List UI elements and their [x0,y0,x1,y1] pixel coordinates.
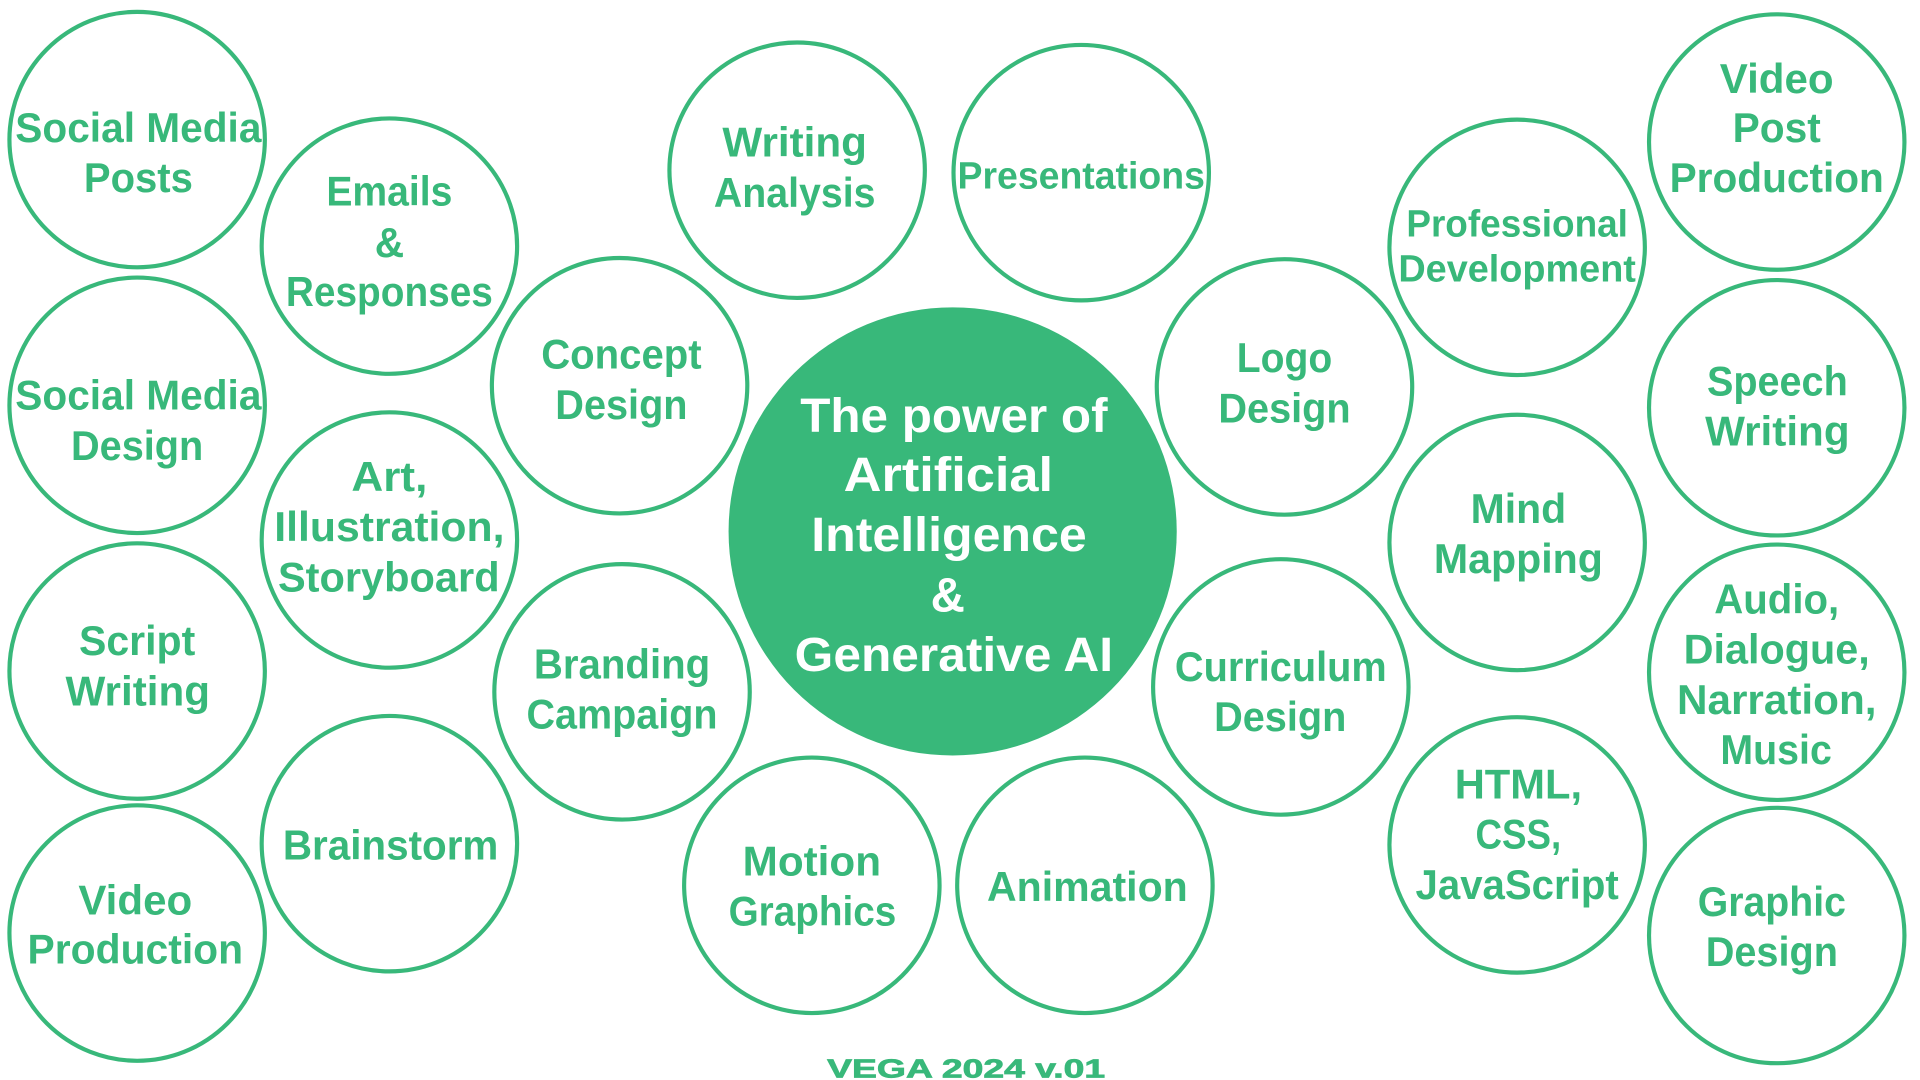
node: Social Media Posts: Posts [84,154,193,201]
node: Script Writing: Script [79,617,195,664]
node: Mind Mapping: Mind [1471,485,1566,532]
central hub: The power of AI and Generative AI: & [931,570,965,623]
node: Audio, Dialogue, Narration, Music: Music [1720,726,1832,773]
node: Logo Design: Logo [1237,334,1332,381]
node: Art, Illustration, Storyboard: Art, [351,453,427,500]
node: Art, Illustration, Storyboard: Storyboard [278,553,500,600]
node: HTML, CSS, JavaScript: JavaScript [1416,861,1619,908]
node: Speech Writing: Speech [1707,358,1848,405]
node: Audio, Dialogue, Narration, Music: Narration, [1677,676,1877,723]
node: HTML, CSS, JavaScript [1389,717,1645,973]
node: Video Post Production [1649,14,1904,270]
node: Social Media Posts: Social Media [15,104,262,151]
node: Emails & Responses: & [375,219,404,266]
node: Logo Design: Design [1218,384,1351,431]
node: Social Media Posts [9,12,265,267]
node: Animation: Animation [987,863,1188,910]
node: Graphic Design: Design [1706,928,1838,975]
central hub: The power of AI and Generative AI: Artificial [844,449,1053,502]
node: Brainstorm: Brainstorm [283,822,498,869]
node: Video Post Production: Video [1720,55,1834,102]
node: Mind Mapping: Mapping [1434,535,1603,582]
node: Video Post Production: Production [1670,154,1884,201]
node: Emails & Responses: Responses [286,268,493,315]
node: Audio, Dialogue, Narration, Music: Audio, [1714,575,1839,622]
node: Audio, Dialogue, Narration, Music [1649,545,1904,800]
node: Motion Graphics: Graphics [729,888,896,935]
node: Video Production [9,805,265,1061]
node: Social Media Design: Design [71,422,203,469]
node: Video Post Production: Post [1733,104,1821,151]
node: Script Writing: Writing [66,667,210,714]
node: Writing Analysis [669,42,925,298]
node: Writing Analysis: Analysis [714,169,876,216]
node: Concept Design: Concept [541,331,702,378]
node: Branding Campaign: Campaign [527,691,718,738]
node: Curriculum Design: Design [1214,693,1346,740]
node: Art, Illustration, Storyboard [262,412,517,668]
node: Professional Development [1389,120,1645,375]
node: Brainstorm [262,716,517,971]
node: Audio, Dialogue, Narration, Music: Dialogue, [1684,626,1870,673]
node: Concept Design [492,258,747,513]
node: Script Writing [9,543,265,799]
node: Art, Illustration, Storyboard: Illustration, [274,503,504,550]
node: Speech Writing [1649,280,1904,535]
node: Curriculum Design: Curriculum [1175,643,1387,690]
node: Animation [957,758,1213,1013]
node: Presentations [954,45,1209,300]
node: Curriculum Design [1153,559,1409,815]
node: Social Media Design: Social Media [15,372,262,419]
node: Branding Campaign [494,564,750,820]
node: Professional Development: Development [1398,249,1636,291]
node: Emails & Responses: Emails [326,168,452,215]
node: Graphic Design: Graphic [1698,878,1846,925]
node: Motion Graphics [684,758,940,1013]
node: Concept Design: Design [555,381,688,428]
node: Logo Design [1157,259,1412,515]
node: Video Production: Video [78,877,192,924]
central hub: The power of AI and Generative AI: Generative AI [795,629,1113,682]
node: Social Media Design [9,278,265,533]
node: HTML, CSS, JavaScript: HTML, [1455,760,1582,807]
node: Professional Development: Professional [1406,203,1628,245]
central hub: The power of AI and Generative AI [729,307,1177,756]
node: Writing Analysis: Writing [722,119,867,166]
node: Video Production: Production [28,926,243,973]
node: Motion Graphics: Motion [743,838,881,885]
node: HTML, CSS, JavaScript: CSS, [1476,811,1561,858]
node: Branding Campaign: Branding [534,640,710,687]
node: Presentations: Presentations [958,156,1205,198]
node: Speech Writing: Writing [1705,408,1850,455]
node: Graphic Design [1649,808,1904,1063]
node: Emails & Responses [262,118,517,374]
central hub: The power of AI and Generative AI: Intelligence [811,509,1087,562]
node: Mind Mapping [1389,415,1645,670]
central hub: The power of AI and Generative AI: The power of [800,390,1108,443]
